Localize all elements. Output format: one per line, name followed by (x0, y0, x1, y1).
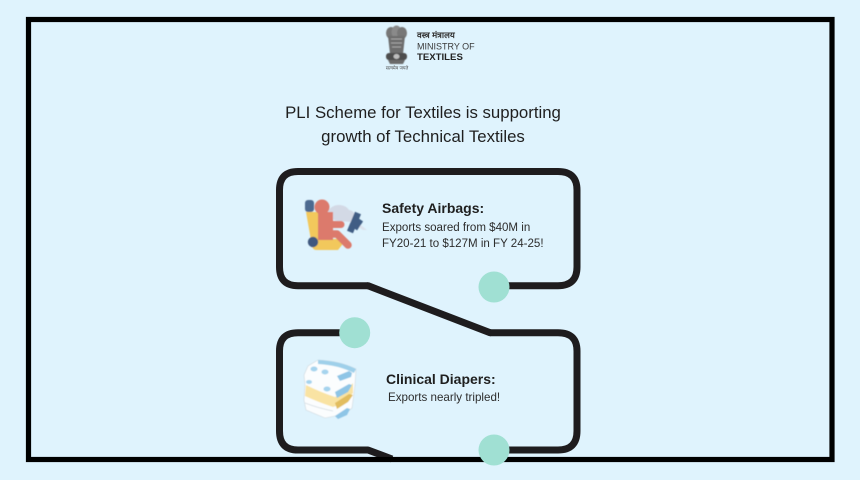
icon: stacked diapers (304, 360, 356, 419)
header logo: Ministry of Textiles (386, 26, 475, 70)
ministry name: MINISTRY OF (417, 42, 475, 52)
description: Exports soared from $40M in (382, 222, 530, 234)
text block: safety airbags (382, 200, 544, 250)
node: clinical diapers top (339, 317, 370, 348)
steering wheel (350, 213, 358, 232)
node: clinical diapers bottom (478, 434, 510, 466)
icon: airbag and seated passenger (305, 200, 367, 250)
airbag (328, 205, 355, 222)
passenger (314, 200, 330, 214)
panel: clinical diapers outline (280, 333, 577, 459)
textiles name: TEXTILES (417, 52, 463, 63)
Hindi ministry name: वस्त्र मंत्रालय (416, 30, 456, 40)
title: growth of Technical Textiles (321, 127, 525, 146)
description: Exports nearly tripled! (388, 391, 500, 404)
diaper stack silhouette (304, 360, 356, 418)
panel: safety airbags outline (280, 172, 577, 286)
pattern dots (310, 366, 318, 372)
emblem motto: सत्यमेव जयते (386, 64, 409, 70)
title (285, 103, 561, 146)
seat (305, 200, 314, 212)
node: safety airbags (478, 272, 510, 302)
waistband (318, 360, 356, 373)
heading: Safety Airbags: (382, 200, 484, 216)
title: PLI Scheme for Textiles is supporting (285, 103, 561, 122)
description: FY20-21 to $127M in FY 24-25! (382, 238, 544, 250)
description (382, 222, 544, 250)
icon: national emblem (386, 26, 407, 64)
connector between panels (368, 286, 490, 333)
side tabs (337, 371, 352, 381)
text block: clinical diapers (386, 371, 500, 404)
heading: Clinical Diapers: (386, 371, 496, 387)
middle layer (305, 383, 353, 407)
